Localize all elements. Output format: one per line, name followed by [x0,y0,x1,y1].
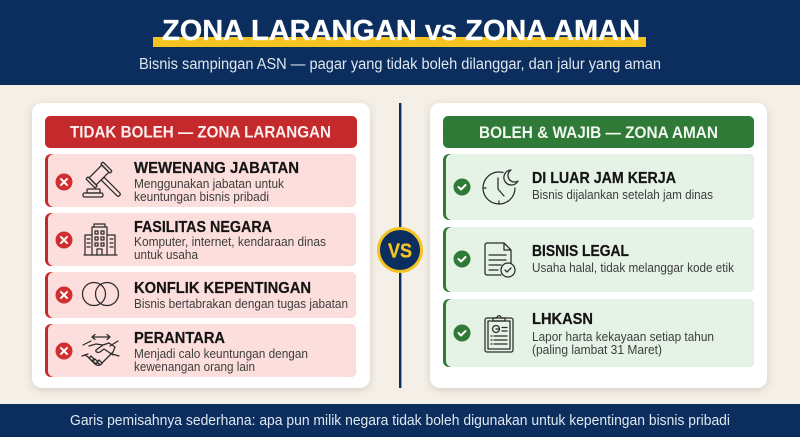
row: fasilitas negara: Komputer, internet, kendaraan dinas [134,235,326,249]
icon: clipboard report [485,316,513,352]
title highlight bar [153,37,646,47]
icon: check mark [454,178,470,196]
panel heading: tidak boleh: TIDAK BOLEH — ZONA LARANGAN [70,124,331,142]
center divider with VS badge: VS [388,240,412,262]
icon: x mark [56,342,72,360]
row: perantara: kewenangan orang lain [134,360,255,374]
icon: gavel [83,162,128,204]
row: fasilitas negara: FASILITAS NEGARA [134,219,272,236]
row: perantara: PERANTARA [134,330,225,347]
row: di luar jam kerja: DI LUAR JAM KERJA [532,170,676,187]
icon: check mark [454,250,470,268]
icon: building [84,224,117,255]
icon: x mark [56,232,72,248]
row: di luar jam kerja: Bisnis dijalankan setelah jam dinas [532,188,713,202]
title: ZONA LARANGAN vs ZONA AMAN [162,15,640,47]
panel: zona aman [430,103,767,388]
row: konflik kepentingan [45,272,356,318]
subtitle: Bisnis sampingan ASN — pagar yang tidak boleh dilanggar, dan jalur yang aman [139,56,661,73]
panel heading: boleh dan wajib: BOLEH & WAJIB — ZONA AMAN [479,124,718,142]
row: fasilitas negara: untuk usaha [134,248,198,262]
row: bisnis legal: Usaha halal, tidak melanggar kode etik [532,261,735,275]
row: lhkasn [443,299,754,367]
footer banner [0,404,800,437]
row: fasilitas negara [45,213,356,266]
footer banner: Garis pemisahnya sederhana: apa pun milik negara tidak boleh digunakan untuk kepentingan bisnis pribadi [70,412,730,429]
icon: handshake [82,334,119,365]
icon: x mark [56,286,72,304]
center divider with VS badge [378,103,422,388]
row: perantara [45,324,356,377]
row: konflik kepentingan: KONFLIK KEPENTINGAN [134,280,311,297]
row: wewenang jabatan: keuntungan bisnis pribadi [134,190,269,204]
panel: zona larangan [32,103,370,388]
header banner [0,0,800,85]
row: wewenang jabatan: Menggunakan jabatan untuk [134,177,285,191]
icon: overlapping circles [82,282,118,306]
row: bisnis legal [443,227,754,292]
panel heading: boleh dan wajib [443,116,754,148]
row: lhkasn: Lapor harta kekayaan setiap tahun [532,330,714,344]
panel heading: tidak boleh [45,116,357,148]
icon: x mark [56,174,72,190]
row: lhkasn: LHKASN [532,311,593,328]
row: wewenang jabatan: WEWENANG JABATAN [134,160,299,177]
row: di luar jam kerja [443,154,754,220]
icon: clock and moon [483,170,518,204]
icon: document with check [485,243,515,277]
row: wewenang jabatan [45,154,356,207]
row: lhkasn: (paling lambat 31 Maret) [532,343,662,357]
row: bisnis legal: BISNIS LEGAL [532,243,629,260]
row: perantara: Menjadi calo keuntungan dengan [134,347,308,361]
row: konflik kepentingan: Bisnis bertabrakan dengan tugas jabatan [134,297,348,311]
icon: check mark [454,324,470,342]
